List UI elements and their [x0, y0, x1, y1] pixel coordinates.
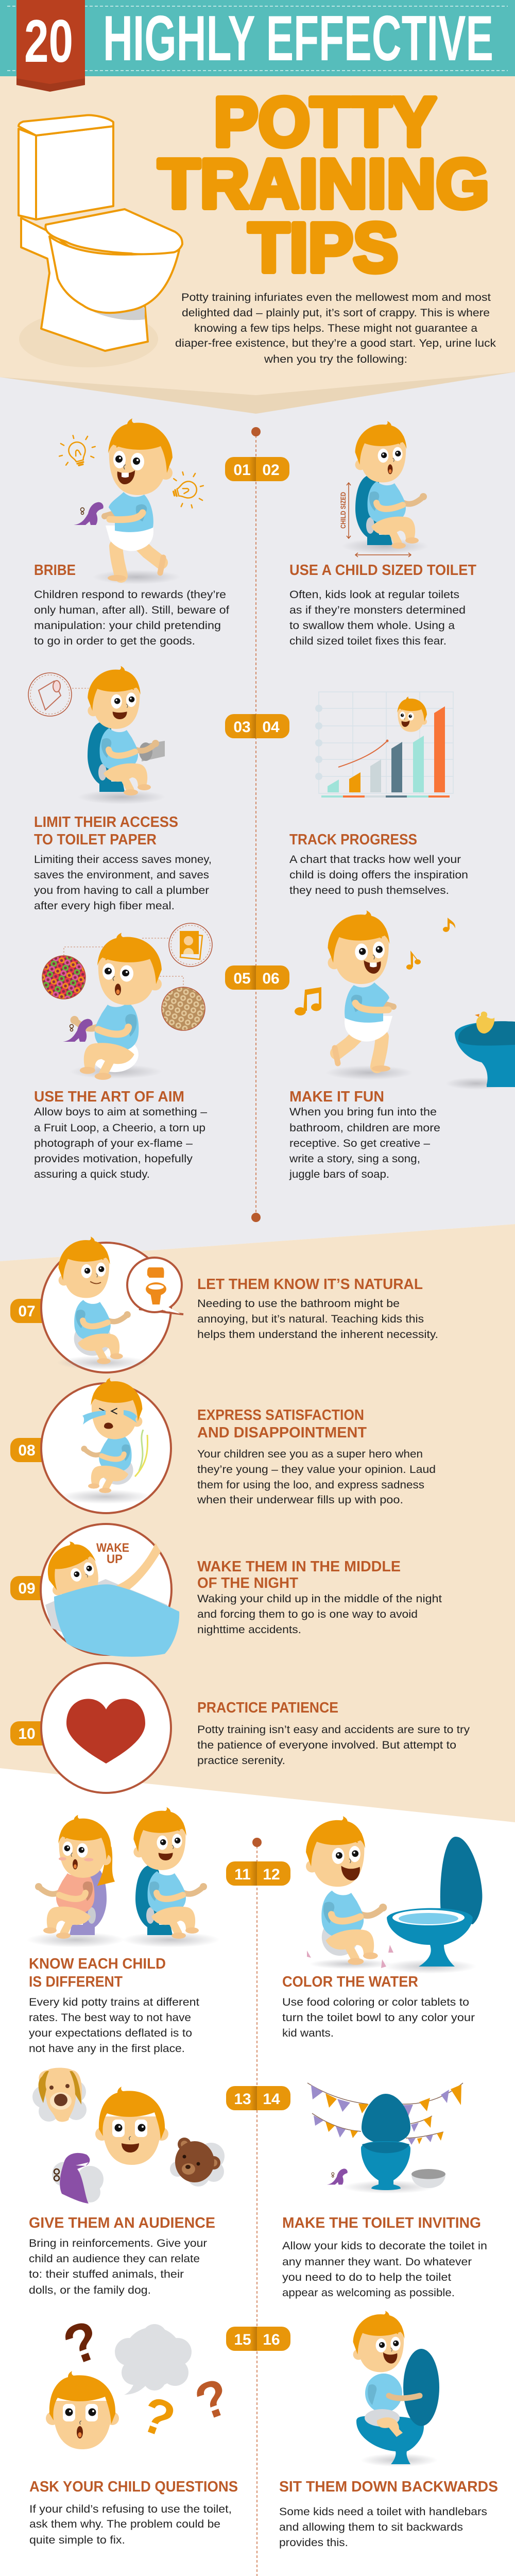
- grey section background: [0, 371, 515, 1261]
- tip 11 text: [29, 1996, 199, 2055]
- tip 01 text: Children respond to rewards (they’re: [34, 589, 226, 601]
- intro paragraph: delighted dad – plainly put, it’s sort of crappy. This is where: [182, 307, 490, 319]
- intro paragraph: diaper-free existence, but they’re a good start. Yep, urine luck: [175, 337, 496, 349]
- tip 08 text: they’re young – they value your opinion. Laud: [197, 1464, 436, 1476]
- badge 05 06: 06: [262, 970, 280, 987]
- badge 15 16: 16: [263, 2331, 280, 2348]
- tip 13 text: child an audience they can relate: [29, 2253, 200, 2265]
- tip 03 heading: TO TOILET PAPER: [34, 832, 157, 848]
- tip 10 text: Potty training isn’t easy and accidents are sure to try: [197, 1724, 470, 1736]
- illustration: kid and toilet with coloured water: [306, 1816, 482, 1974]
- tip 06 text: When you bring fun into the: [289, 1106, 437, 1118]
- badge 10: [10, 1721, 57, 1745]
- tip 10 text: practice serenity.: [197, 1755, 285, 1767]
- tip 08 text: when their underwear fills up with poo.: [197, 1494, 403, 1506]
- tip 13 text: [29, 2238, 207, 2296]
- tip 13 heading: GIVE THEM AN AUDIENCE: [29, 2215, 215, 2231]
- badge 05 06: [225, 965, 289, 990]
- header banner: 20: [24, 7, 73, 75]
- tip 04 text: [289, 854, 468, 896]
- tip 08 text: [197, 1448, 436, 1506]
- tip 09 text: Waking your child up in the middle of the night: [197, 1593, 442, 1605]
- tip 01 text: to go in order to get the goods.: [34, 635, 195, 647]
- badge 01 02: [225, 457, 289, 481]
- tip 03 text: you from having to call a plumber: [34, 885, 209, 896]
- intro paragraph: [175, 292, 496, 365]
- illustration: kid with toilet paper: [28, 666, 165, 804]
- tip 07 text: Needing to use the bathroom might be: [197, 1298, 400, 1310]
- tip 06 text: juggle bars of soap.: [289, 1168, 389, 1180]
- title: potty training tips: [158, 83, 489, 286]
- tip 16 text: provides this.: [279, 2537, 348, 2549]
- tip 12 text: turn the toilet bowl to any color your: [282, 2012, 475, 2024]
- tip 13 text: dolls, or the family dog.: [29, 2284, 151, 2296]
- tip 01 text: [34, 589, 229, 647]
- tip 12 text: kid wants.: [282, 2027, 334, 2039]
- tip 05 text: [34, 1106, 207, 1180]
- tip 15 text: [29, 2503, 232, 2546]
- tip 13 text: to: their stuffed animals, their: [29, 2268, 184, 2280]
- tip 02 text: [289, 589, 466, 647]
- tip 03 text: saves the environment, and saves: [34, 869, 209, 881]
- badge 01 02: 01: [233, 462, 251, 479]
- badge 13 14: 13: [234, 2091, 251, 2108]
- illustration: crying kid: [41, 1378, 171, 1513]
- tip 10 heading: PRACTICE PATIENCE: [197, 1700, 338, 1716]
- tip 01 heading: BRIBE: [34, 562, 76, 579]
- tip 03 text: Limiting their access saves money,: [34, 854, 212, 866]
- badge 03 04: [225, 714, 289, 738]
- tip 02 text: as if they’re monsters determined: [289, 604, 466, 616]
- timeline tips 11 to 16: [252, 1838, 262, 2576]
- tip 15 heading: ASK YOUR CHILD QUESTIONS: [29, 2479, 238, 2495]
- tip 08 heading: [197, 1407, 367, 1441]
- tip 14 text: Allow your kids to decorate the toilet in: [282, 2240, 487, 2252]
- header banner: [0, 0, 515, 92]
- tip 02 heading: USE A CHILD SIZED TOILET: [289, 562, 477, 579]
- tip 07 text: helps them understand the inherent necessity.: [197, 1329, 438, 1341]
- icon: heart: [41, 1663, 171, 1793]
- tip 03 text: after every high fiber meal.: [34, 900, 175, 912]
- illustration: toilet and rubber duck: [445, 1011, 515, 1090]
- tip 01 text: manipulation: your child pretending: [34, 620, 221, 632]
- title: potty training tips: TRAINING: [158, 145, 489, 223]
- badge 11 12: 12: [263, 1866, 280, 1883]
- tip 16 text: [279, 2506, 487, 2549]
- tip 05 text: Allow boys to aim at something –: [34, 1106, 207, 1118]
- illustration: kid on child sized toilet: [339, 421, 429, 557]
- badge 07: 07: [18, 1303, 36, 1320]
- panel: tip 09: [10, 1524, 442, 1657]
- tip 06 text: receptive. So get creative –: [289, 1138, 430, 1149]
- tip 03 heading: [34, 814, 178, 848]
- illustration: kid with dog, dinosaur and bear audience: [32, 2068, 225, 2204]
- cream intro background: [0, 76, 515, 395]
- tip 03 text: [34, 854, 212, 912]
- tip 02 text: to swallow them whole. Using a: [289, 620, 455, 632]
- tip 11 heading: KNOW EACH CHILD: [29, 1956, 166, 1972]
- illustration: sleeping kid being woken: UP: [107, 1552, 123, 1566]
- illustration: kid with dinosaur and light bulbs: [55, 418, 208, 584]
- tip 02 text: child sized toilet fixes this fear.: [289, 635, 447, 647]
- badge 03 04: 04: [262, 719, 280, 736]
- tip 08 heading: AND DISAPPOINTMENT: [197, 1425, 367, 1441]
- intro paragraph: Potty training infuriates even the mellowest mom and most: [181, 292, 491, 303]
- tip 03 heading: LIMIT THEIR ACCESS: [34, 814, 178, 831]
- tip 15 text: quite simple to fix.: [29, 2534, 125, 2546]
- tip 09 heading: OF THE NIGHT: [197, 1575, 299, 1591]
- tip 09 heading: [197, 1558, 401, 1591]
- tip 01 text: only human, after all). Still, beware of: [34, 604, 229, 616]
- intro paragraph: when you try the following:: [264, 353, 407, 365]
- tip 16 text: and allowing them to sit backwards: [279, 2521, 463, 2533]
- tip 04 text: A chart that tracks how well your: [289, 854, 461, 866]
- tip 16 heading: SIT THEM DOWN BACKWARDS: [279, 2479, 498, 2495]
- illustration: curious kid with question marks: ?: [56, 2309, 108, 2377]
- tip 08 heading: EXPRESS SATISFACTION: [197, 1407, 364, 1423]
- title: potty training tips: TIPS: [248, 209, 398, 286]
- illustration: sleeping kid being woken: [40, 1524, 179, 1657]
- tip 12 text: Use food coloring or color tablets to: [282, 1996, 469, 2008]
- tip 15 text: ask them why. The problem could be: [29, 2518, 220, 2530]
- tip 04 heading: TRACK PROGRESS: [289, 832, 417, 848]
- tip 14 text: appear as welcoming as possible.: [282, 2287, 455, 2299]
- tip 15 text: If your child’s refusing to use the toilet,: [29, 2503, 232, 2515]
- tip 10 text: the patience of everyone involved. But attempt to: [197, 1739, 456, 1751]
- badge 09: 09: [18, 1580, 36, 1597]
- tip 12 heading: COLOR THE WATER: [282, 1974, 418, 1990]
- tip 13 text: Bring in reinforcements. Give your: [29, 2238, 207, 2249]
- illustration: kid sitting backwards on toilet: [353, 2311, 439, 2467]
- illustration: curious kid with question marks: ?: [134, 2385, 182, 2449]
- tip 10 text: [197, 1724, 470, 1767]
- illustration: kid with aiming targets: [42, 923, 212, 1080]
- badge 05 06: 05: [233, 970, 251, 987]
- tip 11 text: not have any in the first place.: [29, 2043, 185, 2055]
- tip 02 text: Often, kids look at regular toilets: [289, 589, 459, 601]
- tip 11 text: rates. The best way to not have: [29, 2012, 191, 2024]
- illustration: kid and toilet speech bubble: [41, 1236, 183, 1372]
- badge 11 12: [226, 1861, 290, 1886]
- tip 07 text: annoying, but it’s natural. Teaching kids this: [197, 1313, 424, 1325]
- tip 06 heading: MAKE IT FUN: [289, 1089, 384, 1105]
- tip 04 text: they need to push themselves.: [289, 885, 449, 896]
- badge 10: 10: [18, 1725, 36, 1742]
- tip 11 heading: [29, 1956, 166, 1990]
- panel: tip 08: [10, 1378, 436, 1513]
- badge 15 16: [226, 2327, 290, 2351]
- tip 14 text: any manner they want. Do whatever: [282, 2256, 472, 2268]
- tip 08 text: Your children see you as a super hero when: [197, 1448, 423, 1460]
- tip 05 heading: USE THE ART OF AIM: [34, 1089, 184, 1105]
- badge 11 12: 11: [234, 1866, 251, 1883]
- tip 14 heading: MAKE THE TOILET INVITING: [282, 2215, 481, 2231]
- badge 03 04: 03: [233, 719, 251, 736]
- badge 01 02: 02: [262, 462, 280, 479]
- intro paragraph: knowing a few tips helps. These might not guarantee a: [194, 323, 477, 334]
- illustration: decorated toilet with bunting: [307, 2083, 463, 2194]
- tip 05 text: provides motivation, hopefully: [34, 1153, 193, 1165]
- tip 07 heading: LET THEM KNOW IT’S NATURAL: [197, 1276, 423, 1293]
- badge 08: [10, 1438, 57, 1462]
- tip 11 text: Every kid potty trains at different: [29, 1996, 199, 2008]
- chart: progress bars with kid: [315, 692, 453, 796]
- tip 05 text: a Fruit Loop, a Cheerio, a torn up: [34, 1122, 205, 1134]
- tip 11 heading: IS DIFFERENT: [29, 1974, 123, 1990]
- tip 05 text: assuring a quick study.: [34, 1168, 150, 1180]
- tip 06 text: bathroom, children are more: [289, 1122, 440, 1134]
- panel: tip 07: [10, 1236, 438, 1372]
- badge 13 14: [226, 2086, 290, 2110]
- badge 08: 08: [18, 1442, 36, 1459]
- illustration: sleeping kid being woken: WAKE: [96, 1541, 129, 1555]
- illustration: kid on child sized toilet: CHILD SIZED: [339, 492, 347, 529]
- tip 09 text: [197, 1593, 442, 1636]
- illustration: toilet: [19, 115, 182, 367]
- tip 09 heading: WAKE THEM IN THE MIDDLE: [197, 1558, 401, 1575]
- tip 08 text: them for using the loo, and express sadness: [197, 1479, 424, 1491]
- title: potty training tips: POTTY: [214, 83, 436, 161]
- tip 05 text: photograph of your ex-flame –: [34, 1138, 193, 1149]
- badge 09: [10, 1576, 57, 1600]
- illustration: curious kid with question marks: ?: [188, 2367, 237, 2432]
- badge 15 16: 15: [234, 2331, 251, 2348]
- tip 09 text: nighttime accidents.: [197, 1624, 301, 1636]
- cream tips 7 to 10 background: [0, 1224, 515, 1822]
- tip 07 text: [197, 1298, 438, 1341]
- dark chevron shadow: [0, 361, 515, 414]
- tip 12 text: [282, 1996, 475, 2039]
- tip 06 text: [289, 1106, 440, 1180]
- tip 06 text: write a story, sing a song,: [289, 1153, 420, 1165]
- illustration: curious kid with question marks: [46, 2309, 237, 2449]
- badge 13 14: 14: [263, 2091, 280, 2108]
- tip 11 text: your expectations deflated is to: [29, 2027, 192, 2039]
- badge 07: [10, 1299, 57, 1323]
- tip 09 text: and forcing them to go is one way to avoid: [197, 1608, 418, 1620]
- panel: tip 10: [10, 1663, 470, 1793]
- illustration: kid dancing with music notes: [295, 910, 455, 1080]
- tip 14 text: [282, 2240, 487, 2299]
- tip 14 text: you need to do to help the toilet: [282, 2272, 451, 2283]
- tip 04 text: child is doing offers the inspiration: [289, 869, 468, 881]
- timeline tips 1 to 6: [251, 427, 261, 1222]
- illustration: girl and boy on potties: [27, 1807, 220, 1947]
- tip 16 text: Some kids need a toilet with handlebars: [279, 2506, 487, 2518]
